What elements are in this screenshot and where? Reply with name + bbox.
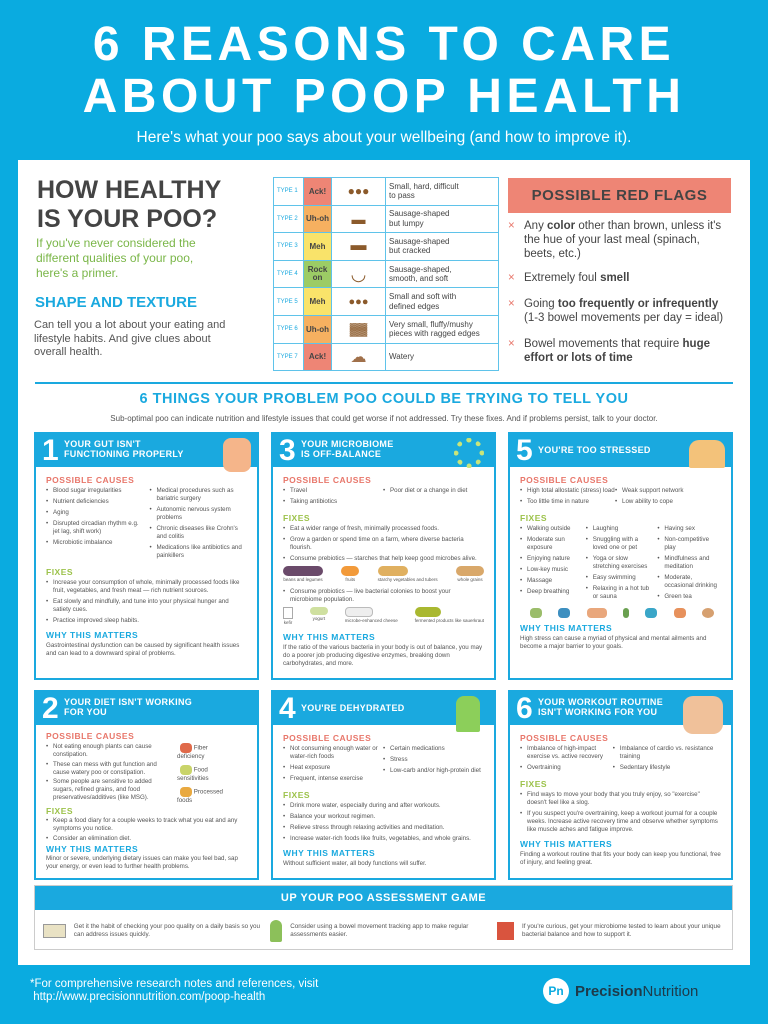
table: bristol scale: ▬: [350, 237, 366, 254]
footer note: http://www.precisionnutrition.com/poop-health: [33, 991, 265, 1003]
card 1: YOUR GUT ISN'T: [64, 439, 141, 449]
card 3: FIXES: [283, 513, 310, 523]
table: bristol scale: TYPE 5: [277, 299, 298, 305]
table: bristol scale: TYPE 2: [277, 216, 298, 222]
table: bristol scale: Small, hard, difficult: [389, 182, 459, 191]
table: bristol scale: on: [313, 273, 322, 282]
card 3: Taking antibiotics: [290, 498, 337, 505]
card 1: Disrupted circadian rhythm e.g. jet lag, shift work): [53, 520, 139, 535]
card 6: YOUR WORKOUT ROUTINE: [538, 697, 663, 707]
card 4: Stress: [390, 756, 408, 763]
card 3: 3: [279, 434, 296, 467]
sub text: Sub-optimal poo can indicate nutrition and lifestyle issues that could get worse if not addressed. Try these fixes. And if problems persist, talk to your doctor.: [110, 414, 658, 423]
table: bristol scale: Watery: [389, 352, 414, 361]
card 5: Low ability to cope: [622, 498, 673, 505]
assessment game panel: If you're curious, get your microbiome tested to learn about your unique bacterial balance and how to support it.: [522, 923, 721, 938]
table: bristol scale: [273, 177, 499, 371]
card 6: Sedentary lifestyle: [620, 764, 670, 771]
table: bristol scale: Uh-oh: [306, 214, 329, 223]
card 2: YOUR DIET ISN'T WORKING: [64, 697, 192, 707]
card 3: kefir: [284, 620, 292, 625]
card 5: Low-key music: [527, 566, 568, 573]
heading: shape and texture: SHAPE AND TEXTURE: [35, 294, 197, 311]
red flags list: ×: [508, 220, 515, 232]
card 4: Relieve stress through relaxing activities and meditation.: [290, 824, 444, 831]
table: bristol scale: TYPE 7: [277, 354, 298, 360]
red flags list: ×: [508, 272, 515, 284]
card 4: Without sufficient water, all body functions will suffer.: [283, 860, 427, 867]
logo: PrecisionNutrition: [575, 982, 698, 1000]
table: bristol scale: Rock: [308, 265, 327, 274]
card 2: Fiber deficiency: [177, 745, 208, 760]
white panel: [18, 160, 750, 965]
table: bristol scale: TYPE 4: [277, 271, 298, 277]
table: bristol scale: pieces with ragged edges: [389, 329, 480, 338]
card 2: FOR YOU: [64, 707, 107, 717]
card 1: WHY THIS MATTERS: [46, 630, 138, 640]
card 3: YOUR MICROBIOME: [301, 439, 394, 449]
card 1: FIXES: [46, 567, 73, 577]
card 6: Finding a workout routine that fits your body can keep you functional, free of injury, and feeling great.: [520, 851, 721, 866]
table: bristol scale: Uh-oh: [306, 325, 329, 334]
table: bristol scale: but cracked: [389, 246, 430, 255]
card 1: Blood sugar irregularities: [53, 487, 121, 494]
card 3: [271, 432, 496, 680]
table: bristol scale: ▓▓: [350, 322, 367, 336]
card 6: 6: [516, 692, 533, 725]
card 5: 5: [516, 434, 533, 467]
card 2: [34, 690, 259, 880]
card 5: POSSIBLE CAUSES: [520, 475, 608, 485]
heading: 6 things: 6 THINGS YOUR PROBLEM POO COULD BE TRYING TO TELL YOU: [140, 391, 628, 407]
card 6: FIXES: [520, 779, 547, 789]
red flags header: POSSIBLE RED FLAGS: [532, 187, 707, 204]
heading: how healthy: HOW HEALTHY: [37, 176, 221, 204]
card 5: Snuggling with a loved one or pet: [593, 536, 638, 551]
card 2: Not eating enough plants can cause constipation.: [53, 743, 152, 758]
logo: [543, 978, 698, 1004]
shape text: Can tell you a lot about your eating and lifestyle habits. And give clues about overall health.: [34, 319, 225, 358]
table: bristol scale: Sausage-shaped: [389, 237, 450, 246]
table: bristol scale: ◡: [351, 264, 366, 284]
card 2: Food sensitivities: [177, 767, 209, 782]
card 6: Find ways to move your body that you truly enjoy, so "exercise" doesn't feel like a slog.: [527, 791, 700, 806]
card 1: Eat slowly and mindfully, and tune into your physical hunger and satiety cues.: [53, 598, 229, 613]
assessment game panel: [34, 885, 733, 950]
card 3: If the ratio of the various bacteria in your body is out of balance, you may do a poorer job producing digestive enzymes, breaking down carbohydrates, and more.: [283, 644, 482, 667]
card 3: Consume prebiotics — starches that help keep good microbes alive.: [290, 555, 477, 562]
card 5: High stress can cause a myriad of physical and mental ailments and become a major barrier to your goals.: [520, 635, 706, 650]
card 1: Practice improved sleep habits.: [53, 617, 139, 624]
assessment game panel: Consider using a bowel movement tracking app to make regular assessments easier.: [290, 923, 468, 938]
title: [83, 18, 685, 123]
table: bristol scale: TYPE 6: [277, 326, 298, 332]
card 1: Gastrointestinal dysfunction can be caused by significant health issues and can lead to a downward spiral of problems.: [46, 642, 239, 657]
card 1: Chronic diseases like Crohn's and colitis: [156, 525, 238, 540]
heading: how healthy: [37, 176, 221, 233]
card 3: Grow a garden or spend time on a farm, where diverse bacteria flourish.: [290, 536, 464, 551]
card 1: Medical procedures such as bariatric surgery: [156, 487, 234, 502]
card 3: starchy vegetables and tubers: [378, 577, 438, 582]
card 5: Enjoying nature: [527, 555, 570, 562]
card 6: WHY THIS MATTERS: [520, 839, 612, 849]
table: bristol scale: ●●●: [348, 184, 369, 198]
table: bristol scale: ●●●: [349, 296, 368, 308]
card 5: Easy swimming: [593, 574, 636, 581]
card 6: POSSIBLE CAUSES: [520, 733, 608, 743]
card 3: microbe-enhanced cheese: [345, 618, 398, 623]
card 5: Weak support network: [622, 487, 683, 494]
assessment header: [35, 886, 732, 910]
card 5: Having sex: [664, 525, 695, 532]
table: bristol scale: Very small, fluffy/mushy: [389, 320, 473, 329]
table: bristol scale: Sausage-shaped,: [389, 265, 452, 274]
card 4: YOU'RE DEHYDRATED: [301, 703, 405, 713]
card 1: POSSIBLE CAUSES: [46, 475, 134, 485]
card 4: POSSIBLE CAUSES: [283, 733, 371, 743]
card 4: Increase water-rich foods like fruits, vegetables, and whole grains.: [290, 835, 471, 842]
card 4: Drink more water, especially during and after workouts.: [290, 802, 441, 809]
card 4: Low-carb and/or high-protein diet: [390, 767, 481, 774]
card 4: [271, 690, 496, 880]
card 6: Imbalance of high-impact exercise vs. active recovery: [527, 745, 603, 760]
red flags list: ×: [508, 298, 515, 310]
card 6: [508, 690, 733, 880]
card 5: Green tea: [664, 593, 692, 600]
card 3: Eat a wider range of fresh, minimally processed foods.: [290, 525, 439, 532]
card 3: Travel: [290, 487, 307, 494]
card 5: FIXES: [520, 513, 547, 523]
card 4: FIXES: [283, 790, 310, 800]
red flags list: Extremely foul smell: [524, 272, 629, 284]
card 1: [34, 432, 259, 680]
table: bristol scale: Ack!: [309, 352, 326, 361]
card 1: Microbiotic imbalance: [53, 539, 112, 546]
logo: Pn: [548, 984, 564, 998]
card 5: Massage: [527, 577, 552, 584]
card 2: WHY THIS MATTERS: [46, 844, 138, 854]
card 6: ISN'T WORKING FOR YOU: [538, 707, 657, 717]
footer note: *For comprehensive research notes and references, visit: [30, 978, 318, 990]
table: bristol scale: ☁: [350, 349, 366, 366]
card 6: Imbalance of cardio vs. resistance training: [620, 745, 713, 760]
card 2: These can mess with gut function and cause watery poo or constipation.: [53, 760, 157, 776]
card 3: fermented products like sauerkraut: [415, 618, 484, 623]
card 1: Autonomic nervous system problems: [156, 506, 231, 521]
card 4: Not consuming enough water or water-rich foods: [290, 745, 378, 760]
table: bristol scale: Meh: [310, 242, 326, 251]
card 4: Frequent, intense exercise: [290, 775, 363, 782]
assessment game panel: Get it the habit of checking your poo quality on a daily basis so you can address issues quickly.: [74, 923, 260, 938]
table: bristol scale: to pass: [389, 191, 415, 200]
card 5: Deep breathing: [527, 588, 569, 595]
card 3: fruits: [345, 577, 355, 582]
card 2: Processed foods: [177, 789, 223, 804]
card 3: POSSIBLE CAUSES: [283, 475, 371, 485]
card 5: High total allostatic (stress) load: [527, 487, 615, 494]
table: bristol scale: ▬: [352, 211, 366, 227]
red flags list: Any color other than brown, unless it's the hue of your last meal (spinach, beets, etc.): [524, 220, 721, 260]
card 2: FIXES: [46, 806, 73, 816]
title: ABOUT POOP HEALTH: [83, 70, 685, 123]
table: bristol scale: TYPE 1: [277, 188, 298, 194]
card 5: Moderate, occasional drinking: [664, 574, 717, 589]
table: bristol scale: Ack!: [309, 187, 326, 196]
card 1: Increase your consumption of whole, minimally processed foods like fruit, vegetables, and fresh meat — rich nutrient sources.: [53, 579, 239, 594]
table: bristol scale: Sausage-shaped: [389, 209, 450, 218]
table: bristol scale: defined edges: [389, 302, 439, 311]
card 1: Medications like antibiotics and painkillers: [156, 544, 242, 559]
card 5: Walking outside: [527, 525, 570, 532]
card 3: Poor diet or a change in diet: [390, 487, 467, 494]
card 3: beans and legumes: [283, 577, 323, 582]
card 3: yogurt: [313, 616, 325, 621]
heading: how healthy: IS YOUR POO?: [37, 205, 217, 233]
card 2: Keep a food diary for a couple weeks to track what you eat and any symptoms you notice.: [53, 817, 237, 832]
card 5: Moderate sun exposure: [527, 536, 565, 551]
card 5: Too little time in nature: [527, 498, 589, 505]
card 5: [508, 432, 733, 680]
table: bristol scale: but lumpy: [389, 219, 424, 228]
card 5: Mindfulness and meditation: [664, 555, 709, 570]
card 2: Minor or severe, underlying dietary issues can make you feel bad, sap your energy, or even lead to further health problems.: [46, 854, 238, 870]
card 4: Balance your workout regimen.: [290, 813, 375, 820]
card 6: Overtraining: [527, 764, 561, 771]
table: bristol scale: Meh: [310, 297, 326, 306]
card 4: 4: [279, 692, 296, 725]
card 6: If you suspect you're overtraining, keep a workout journal for a couple weeks. Increase active recovery time and observe whether symptoms like muscle aches and fatigue improve.: [527, 810, 718, 833]
card 2: Some people are sensitive to added sugars, refined grains, and food preservatives/additives (like MSG).: [53, 778, 152, 801]
card 3: IS OFF-BALANCE: [301, 449, 381, 459]
title: 6 REASONS TO CARE: [93, 18, 675, 71]
card 5: WHY THIS MATTERS: [520, 623, 612, 633]
card 1: FUNCTIONING PROPERLY: [64, 449, 184, 459]
card 2: Consider an elimination diet.: [53, 834, 131, 842]
red flags list: Bowel movements that require huge effort or lots of time: [524, 338, 710, 364]
card 4: Certain medications: [390, 745, 445, 752]
card 5: Relaxing in a hot tub or sauna: [593, 585, 649, 600]
card 3: WHY THIS MATTERS: [283, 632, 375, 642]
assessment header: UP YOUR POO ASSESSMENT GAME: [281, 892, 486, 904]
table: bristol scale: TYPE 3: [277, 243, 298, 249]
red flags list: ×: [508, 338, 515, 350]
table: bristol scale: smooth, and soft: [389, 274, 448, 283]
card 2: POSSIBLE CAUSES: [46, 731, 134, 741]
card 4: WHY THIS MATTERS: [283, 848, 375, 858]
table: bristol scale: Small and soft with: [389, 292, 456, 301]
intro text: If you've never considered the different qualities of your poo, here's a primer.: [36, 236, 196, 280]
card 3: Consume probiotics — live bacterial colonies to boost your microbiome population.: [290, 588, 451, 603]
card 4: Heat exposure: [290, 764, 330, 771]
footer note: [30, 978, 318, 1003]
card 2: 2: [42, 692, 59, 725]
card 1: Nutrient deficiencies: [53, 498, 109, 505]
card 1: Aging: [53, 509, 69, 516]
red flags list: [508, 220, 723, 364]
card 5: YOU'RE TOO STRESSED: [538, 445, 651, 455]
card 3: whole grains: [457, 577, 483, 582]
card 5: Laughing: [593, 525, 618, 532]
red flags list: Going too frequently or infrequently (1-3 bowel movements per day = ideal): [524, 298, 723, 324]
card 5: Yoga or slow stretching exercises: [593, 555, 647, 570]
subtitle: Here's what your poo says about your wellbeing (and how to improve it).: [137, 129, 631, 146]
card 5: Non-competitive play: [664, 536, 709, 551]
red flags header: [508, 178, 731, 213]
card 1: 1: [42, 434, 59, 467]
